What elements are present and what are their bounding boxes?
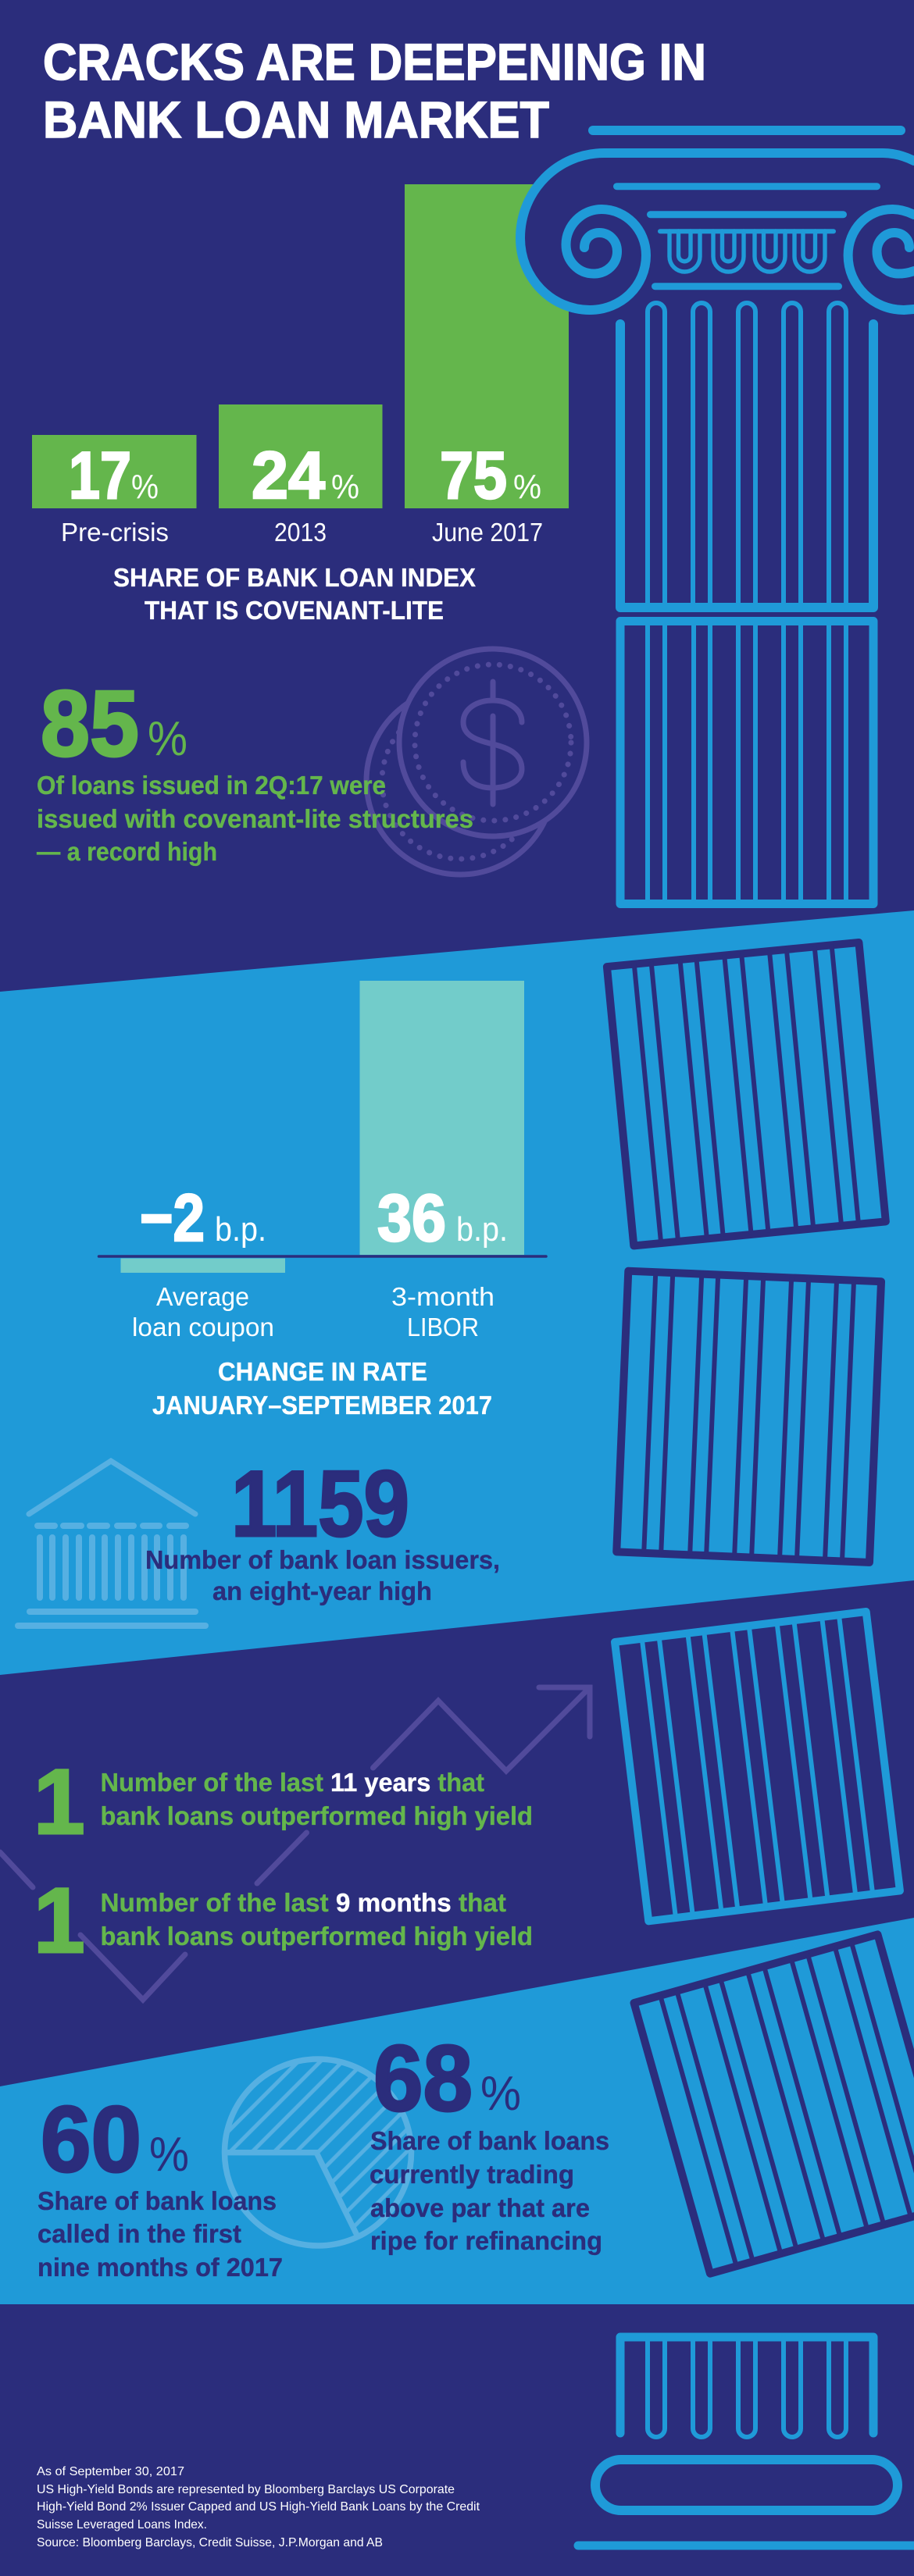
- callout: 85%: %: [148, 712, 187, 766]
- callout: 60%: 60: [41, 2087, 141, 2192]
- bar: June 2017 75%: 75: [440, 439, 507, 513]
- icon: tilted drum 4: [616, 1270, 881, 1562]
- bar: 3-month LIBOR: 3-month: [391, 1282, 494, 1311]
- title: CRACKS ARE DEEPENING IN: [43, 33, 706, 91]
- icon: tilted drum 3: [607, 942, 886, 1245]
- title: [43, 33, 706, 148]
- stat: 9 months: bank loans outperformed high yield: [100, 1922, 533, 1951]
- callout: 60%: Share of bank loans: [37, 2186, 277, 2215]
- bar: pre-crisis 17%: [32, 435, 197, 547]
- callout: 68%: %: [480, 2067, 521, 2121]
- footnote: Suisse Leveraged Loans Index.: [37, 2518, 207, 2531]
- bar: June 2017 75%: June 2017: [432, 518, 543, 547]
- panel: blue rate band: [0, 910, 914, 1675]
- bar: June 2017 75%: %: [513, 468, 541, 506]
- callout: 85%: [37, 672, 473, 866]
- callout: 85%: Of loans issued in 2Q:17 were: [37, 771, 386, 800]
- stat: 9 months: [34, 1869, 533, 1972]
- chart caption: change in rate: [152, 1357, 492, 1420]
- callout: 85%: — a record high: [37, 837, 217, 866]
- chart caption: covenant-lite: [113, 563, 476, 625]
- bar: pre-crisis 17%: %: [131, 468, 159, 506]
- icon: pie chart: [225, 2059, 411, 2246]
- callout: 85%: 85: [41, 672, 139, 776]
- bar: average loan coupon: [120, 1181, 285, 1341]
- stat: 11 years: 1: [34, 1751, 85, 1854]
- bar chart: change in rate: [98, 981, 546, 1341]
- title: BANK LOAN MARKET: [43, 91, 549, 148]
- callout: 85%: issued with covenant-lite structures: [37, 804, 473, 833]
- stat: 9 months: 1: [34, 1869, 85, 1972]
- footnote: [37, 2465, 480, 2549]
- chart caption: covenant-lite: THAT IS COVENANT-LITE: [145, 596, 444, 625]
- stat: 9 months: Number of the last 9 months that: [100, 1888, 506, 1917]
- footnote: High-Yield Bond 2% Issuer Capped and US High-Yield Bank Loans by the Credit: [37, 2500, 480, 2514]
- bar: 2013 24%: %: [331, 468, 359, 506]
- callout: 60%: %: [149, 2128, 189, 2182]
- icon: coins: [366, 649, 587, 875]
- callout: 60%: called in the first: [37, 2219, 241, 2248]
- callout: 1159 issuers: [145, 1452, 500, 1605]
- chart axis: [98, 1255, 546, 1258]
- callout: 68%: [370, 2026, 609, 2255]
- icon: tilted drum 5: [615, 1612, 900, 1921]
- footnote: As of September 30, 2017: [37, 2465, 184, 2478]
- icon: column shaft upper drum: [620, 303, 873, 607]
- bar: 3-month LIBOR: LIBOR: [407, 1313, 479, 1341]
- bar: 2013 24%: 24: [252, 439, 325, 513]
- callout: 1159 issuers: Number of bank loan issuers,: [145, 1545, 500, 1574]
- callout: 68%: Share of bank loans: [370, 2126, 609, 2155]
- bar: 3-month LIBOR: 36: [377, 1181, 446, 1256]
- bar chart: covenant-lite share: [32, 184, 569, 547]
- bar: average loan coupon: Average: [156, 1282, 249, 1311]
- bar: 2013 24%: [219, 404, 383, 547]
- footnote: US High-Yield Bonds are represented by Bloomberg Barclays US Corporate: [37, 2483, 455, 2496]
- bar: average loan coupon: loan coupon: [132, 1313, 274, 1341]
- footnote: Source: Bloomberg Barclays, Credit Suisse, J.P.Morgan and AB: [37, 2536, 383, 2549]
- stat: 11 years: [34, 1751, 533, 1854]
- stat: 11 years: bank loans outperformed high yield: [100, 1801, 533, 1830]
- callout: 1159 issuers: an eight-year high: [212, 1577, 432, 1605]
- bar: 2013 24%: 2013: [274, 518, 327, 547]
- icon: tilted drum 6: [634, 1934, 914, 2274]
- callout: 68%: ripe for refinancing: [370, 2226, 602, 2255]
- bar: 3-month LIBOR: b.p.: [456, 1210, 508, 1249]
- icon: column drum 2: [620, 621, 873, 904]
- bar: average loan coupon: b.p.: [215, 1210, 266, 1249]
- callout: 68%: above par that are: [370, 2193, 590, 2222]
- icon: bank building: [18, 1461, 205, 1626]
- bar: average loan coupon: −2: [140, 1181, 205, 1256]
- bar: 3-month LIBOR: [359, 981, 524, 1341]
- callout: 68%: currently trading: [370, 2160, 574, 2189]
- panel: blue refinancing band: [0, 1918, 914, 2304]
- callout: 60%: [37, 2087, 283, 2282]
- bar: pre-crisis 17%: Pre-crisis: [61, 518, 169, 547]
- stat: 11 years: Number of the last 11 years that: [100, 1768, 484, 1797]
- bar: pre-crisis 17%: 17: [69, 439, 131, 513]
- chart caption: covenant-lite: SHARE OF BANK LOAN INDEX: [113, 563, 476, 592]
- callout: 68%: 68: [373, 2026, 473, 2131]
- icon: column capital: [520, 130, 914, 310]
- chart caption: change in rate: JANUARY–SEPTEMBER 2017: [152, 1391, 492, 1420]
- callout: 60%: nine months of 2017: [37, 2253, 283, 2282]
- icon: zigzag arrow: [0, 1687, 590, 2000]
- bar: June 2017 75%: [405, 184, 569, 547]
- chart caption: change in rate: CHANGE IN RATE: [218, 1357, 427, 1386]
- callout: 1159 issuers: 1159: [231, 1452, 409, 1556]
- icon: column base: [578, 2337, 914, 2546]
